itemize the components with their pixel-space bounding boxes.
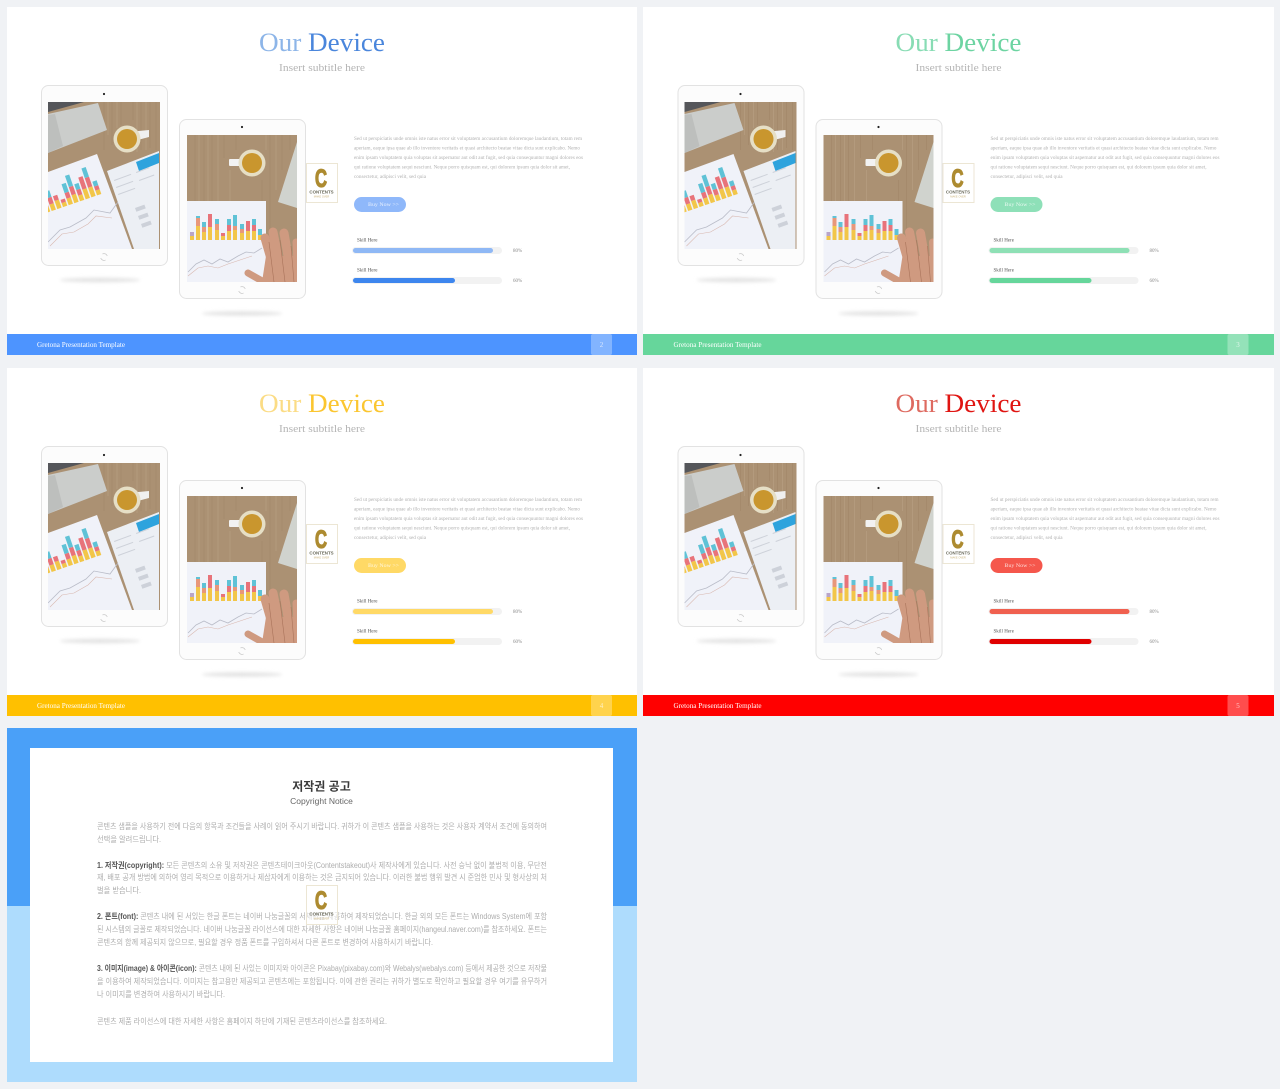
white notice card [30, 748, 613, 1062]
section 3: image and icon: 3. 이미지(image) & 아이콘(icon): 콘텐츠 내에 된 사있는 이미지와 아이콘은 Pixabay(pixabay.com)와 Webalys(webalys.com) 등에서 제공한 것으로 저작물 [97, 963, 547, 973]
title: Our Device [896, 28, 1022, 57]
footer bar: 5 [1236, 702, 1240, 710]
text block: Sed ut perspiciatis unde omnis iste natus error sit voluptatem accusantium doloremque laudantium, totam rem [990, 498, 1219, 503]
text block: enim ipsam voluptatem quia voluptas sit aspernatur aut odit aut fugit, sed quia consequuntur magni dolores eos [990, 156, 1220, 161]
skill bar 1: 80% [513, 610, 522, 615]
skill bar 2: Skill Here [994, 630, 1015, 634]
footer bar: 4 [600, 702, 604, 710]
footer bar: 3 [1236, 341, 1240, 349]
panel: blue slide [7, 7, 637, 355]
text block: qui ratione voluptatem sequi nesciunt. Neque porro quisquam est, qui dolorem ipsum quia dolor sit amet, [354, 166, 570, 170]
logo: MAKE OVER [950, 556, 966, 560]
text block: Sed ut perspiciatis unde omnis iste natus error sit voluptatem accusantium doloremque laudantium, totam rem [990, 137, 1219, 142]
text block: qui ratione voluptatem sequi nesciunt. Neque porro quisquam est, qui dolorem ipsum quia dolor sit amet, [990, 166, 1206, 170]
section 2: font: 된 시스템의 글꼴로 제작되었습니다. 네이버 나눔글꼴 라이선스에 대한 자세한 사항은 네이버 나눔글꼴 홈페이지(hangeul.naver.com)를 참조하세요. 폰트는 [97, 924, 547, 934]
logo [306, 886, 338, 924]
closing line: 콘텐츠 제품 라이선스에 대한 자세한 사항은 홈페이지 하단에 기재된 콘텐츠라이선스를 참조하세요. [97, 1016, 387, 1026]
skill bar 2: 60% [513, 640, 522, 645]
blue upper background [7, 728, 637, 906]
logo: MAKE OVER [950, 194, 966, 198]
icon: right tablet [816, 120, 942, 316]
skill bar 1 [352, 600, 522, 615]
text block: aperiam, eaque ipsa quae ab illo inventore veritatis et quasi architecto beatae vitae dicta sunt explicabo. Nemo [990, 146, 1217, 152]
notice subheading: Copyright Notice [290, 796, 353, 806]
panel: yellow slide [7, 368, 637, 716]
section 2: font [97, 911, 548, 947]
section 2: font: 2. 폰트(font): 콘텐츠 내에 된 서있는 한글 폰트는 네이버 나눔글꼴의 서체만을 제공하여 제작되었습니다. 한글 외의 모든 폰트는 Windows System에 포함 [97, 911, 548, 921]
logo: CONTENTS [309, 550, 334, 556]
skill bar 2 [988, 630, 1159, 645]
logo: CONTENTS [946, 190, 970, 194]
panel: copyright notice slide [7, 728, 637, 1082]
skill bar 2: Skill Here [994, 268, 1015, 274]
skill bar 1: Skill Here [357, 238, 378, 244]
section 1: copyright: 1. 저작권(copyright): 모든 콘텐츠의 소유 및 저작권은 콘텐츠테이크아웃(Contentstakeout)사 제작사에게 있습니다. 사전 승낙 없이 불법적 이용, 무단전 [97, 860, 547, 870]
footer bar: Gretona Presentation Template [674, 340, 762, 349]
section 3: image and icon: 나 이미지를 변경하여 사용하시기 바랍니다. [97, 989, 225, 999]
button [354, 558, 406, 573]
footer bar [643, 334, 1274, 355]
skill bar 1 [352, 238, 522, 254]
logo: C [315, 165, 327, 193]
section 1: copyright: 벌을 받습니다. [97, 885, 141, 895]
logo: C [952, 526, 964, 554]
icon: left tablet [673, 86, 804, 282]
logo: CONTENTS [309, 912, 334, 916]
skill bar 2: 60% [513, 279, 522, 284]
footer bar: Gretona Presentation Template [37, 701, 126, 710]
logo [943, 524, 974, 564]
icon: left tablet [673, 446, 804, 643]
text block: qui ratione voluptatem sequi nesciunt. Neque porro quisquam est, qui dolorem ipsum quia dolor sit amet, [354, 526, 570, 532]
subtitle: Insert subtitle here [916, 62, 1002, 74]
logo [943, 164, 974, 202]
skill bar 1: 80% [513, 249, 522, 254]
logo: MAKE OVER [314, 556, 329, 560]
icon: right tablet [180, 480, 306, 677]
footer bar [643, 695, 1274, 716]
text block: aperiam, eaque ipsa quae ab illo inventore veritatis et quasi architecto beatae vitae dicta sunt explicabo. Nemo [354, 508, 580, 512]
skill bar 1: Skill Here [994, 238, 1015, 244]
skill bar 2: Skill Here [357, 268, 378, 274]
skill bar 1: Skill Here [994, 600, 1015, 604]
logo: C [315, 526, 327, 554]
slide background [7, 368, 637, 716]
skill bar 1 [988, 600, 1159, 615]
button: Buy Now >> [368, 564, 399, 569]
text block: consectetur, adipisci velit, sed quia [354, 175, 427, 180]
icon: right tablet [180, 120, 306, 316]
button [990, 558, 1042, 573]
title: Our Device [259, 389, 385, 418]
subtitle: Insert subtitle here [279, 423, 365, 435]
text block: enim ipsam voluptatem quia voluptas sit aspernatur aut odit aut fugit, sed quia consequuntur magni dolores eos [354, 517, 583, 522]
slide background [643, 7, 1274, 355]
light blue lower background [7, 906, 637, 1082]
intro paragraph: 선택을 알려드립니다. [97, 834, 161, 844]
skill bar 2 [352, 630, 522, 645]
text block [354, 498, 583, 541]
logo: C [952, 165, 964, 193]
title: Our Device [896, 389, 1022, 418]
button: Buy Now >> [368, 203, 399, 208]
text block: aperiam, eaque ipsa quae ab illo inventore veritatis et quasi architecto beatae vitae dicta sunt explicabo. Nemo [990, 508, 1217, 512]
skill bar 1: Skill Here [357, 600, 378, 604]
text block: Sed ut perspiciatis unde omnis iste natus error sit voluptatem accusantium doloremque laudantium, totam rem [354, 137, 582, 142]
footer bar: Gretona Presentation Template [674, 701, 762, 710]
icon: left tablet [36, 86, 168, 282]
subtitle: Insert subtitle here [916, 423, 1002, 435]
logo: CONTENTS [309, 190, 334, 194]
skill bar 2: Skill Here [357, 630, 378, 634]
logo: MAKE OVER [314, 194, 329, 198]
slide background [643, 368, 1274, 716]
button: Buy Now >> [1004, 203, 1036, 208]
logo: C [315, 887, 327, 915]
slide background [7, 7, 637, 355]
panel: red slide [643, 368, 1274, 716]
skill bar 2 [988, 268, 1159, 284]
button [990, 197, 1042, 212]
text block [990, 498, 1220, 541]
title: Our Device [259, 28, 385, 57]
icon: left tablet [36, 446, 168, 643]
button: Buy Now >> [1004, 564, 1036, 569]
section 1: copyright: 재, 배포 공개 방법에 의하여 영리 목적으로 이용하거나 제삼자에게 이용하는 것은 금지되어 있습니다. 이러한 불법 행위 발견 시 준엄한 민사 및 형사상의 처 [97, 872, 547, 882]
text block: qui ratione voluptatem sequi nesciunt. Neque porro quisquam est, qui dolorem ipsum quia dolor sit amet, [990, 526, 1206, 532]
footer bar: Gretona Presentation Template [37, 340, 126, 349]
footer bar [7, 695, 637, 716]
skill bar 1: 80% [1150, 249, 1159, 254]
footer bar [7, 334, 637, 355]
text block: consectetur, adipisci velit, sed quia [354, 536, 427, 541]
skill bar 1: 80% [1150, 610, 1159, 615]
text block: aperiam, eaque ipsa quae ab illo inventore veritatis et quasi architecto beatae vitae dicta sunt explicabo. Nemo [354, 146, 580, 152]
intro paragraph: 콘텐츠 샘플을 사용하기 전에 다음의 항목과 조건들을 사례이 읽어 주시기 바랍니다. 귀하가 이 콘텐츠 샘플을 사용하는 것은 사용자 계약서 조건에 동의하여 [97, 821, 547, 831]
text block: enim ipsam voluptatem quia voluptas sit aspernatur aut odit aut fugit, sed quia consequuntur magni dolores eos [990, 517, 1220, 522]
logo [306, 164, 338, 202]
icon: right tablet [816, 480, 942, 677]
section 3: image and icon: 을 이용하여 제작되었습니다. 이미지는 참고용만 제공되고 콘텐츠에는 포함됩니다. 이에 관한 권리는 귀하가 별도로 확인하고 필요할 경우 여기를 유무하거 [97, 976, 547, 986]
logo: MAKE OVER [314, 916, 329, 920]
skill bar 2 [352, 268, 522, 284]
skill bar 2: 60% [1150, 279, 1159, 284]
text block [354, 137, 583, 180]
logo [306, 524, 338, 564]
panel: green slide [643, 7, 1274, 355]
logo: CONTENTS [946, 550, 970, 556]
subtitle: Insert subtitle here [279, 62, 365, 74]
text block: Sed ut perspiciatis unde omnis iste natus error sit voluptatem accusantium doloremque laudantium, totam rem [354, 498, 582, 503]
text block [990, 137, 1220, 180]
notice heading: 저작권 공고 [292, 778, 351, 794]
footer bar: 2 [600, 341, 604, 349]
skill bar 2: 60% [1150, 640, 1159, 645]
intro paragraph [97, 821, 547, 844]
text block: consectetur, adipisci velit, sed quia [990, 175, 1063, 180]
section 3: image and icon [97, 963, 547, 999]
section 2: font: 콘텐츠의 함께 제공되지 않으므로, 필요할 경우 정품 폰트를 구입하셔서 다른 폰트로 변경하여 사용하시기 바랍니다. [97, 937, 433, 947]
text block: consectetur, adipisci velit, sed quia [990, 536, 1063, 541]
section 1: copyright [97, 860, 547, 895]
skill bar 1 [988, 238, 1159, 254]
text block: enim ipsam voluptatem quia voluptas sit aspernatur aut odit aut fugit, sed quia consequuntur magni dolores eos [354, 156, 583, 161]
button [354, 197, 406, 212]
